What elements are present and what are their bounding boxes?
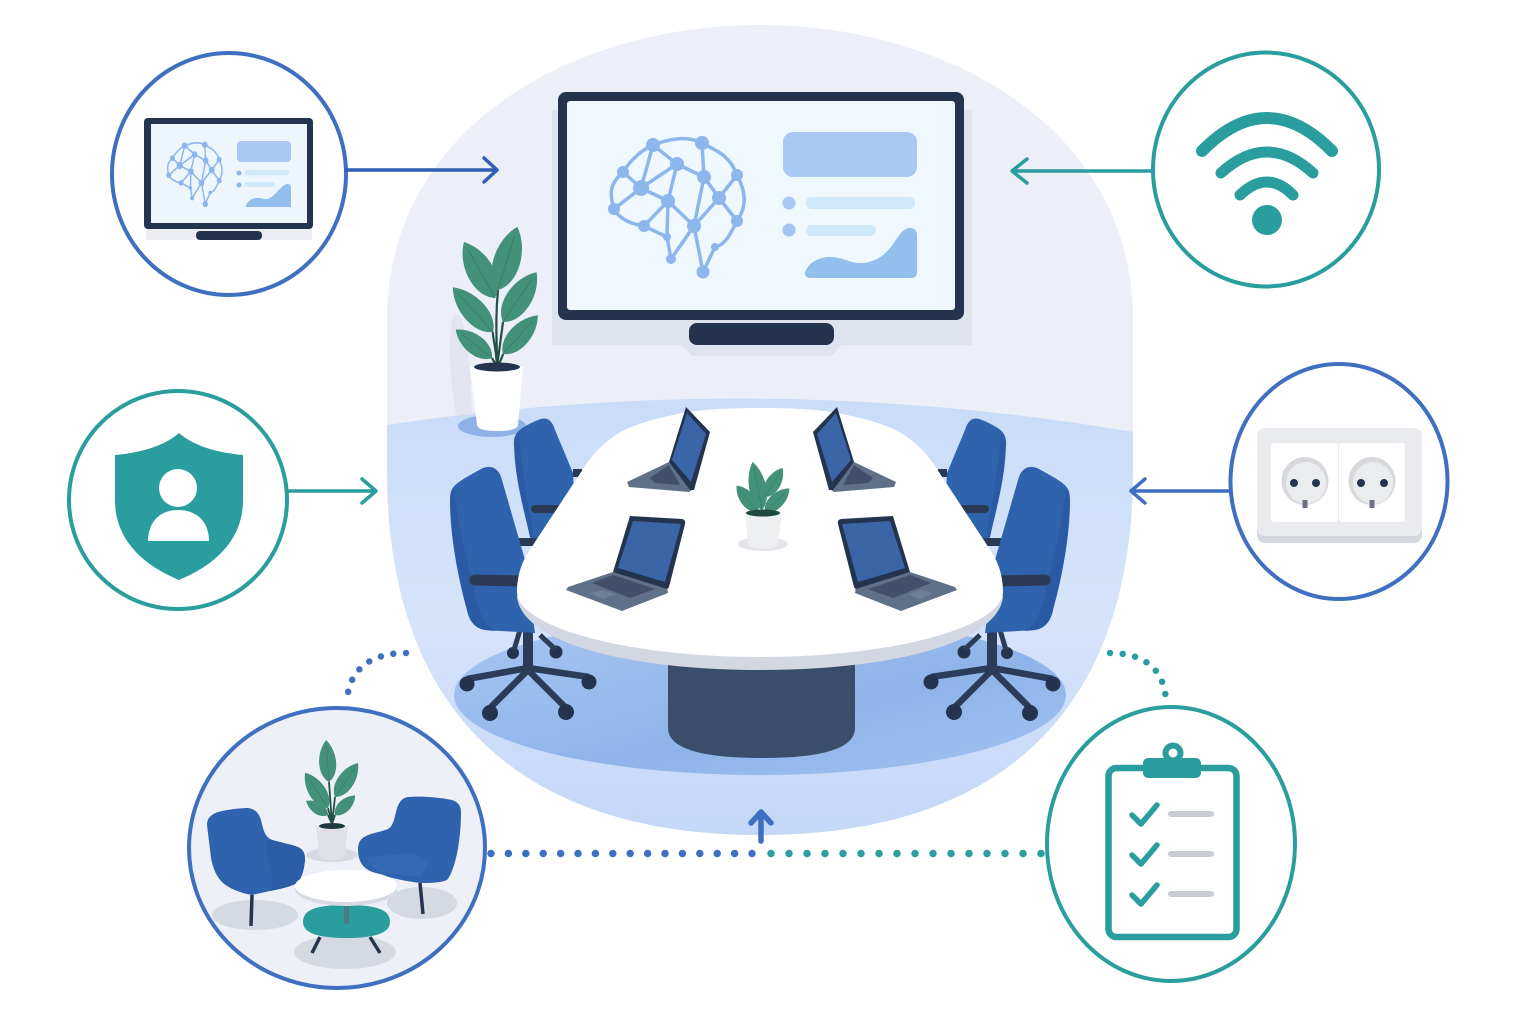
dotted link: checklist bottom [771,850,1042,857]
plant leaves [444,223,547,366]
slide header block [783,132,917,177]
rear left chair [514,418,582,545]
dotted link: lounge bottom [490,850,752,857]
soundbar camera [689,323,834,345]
circle [189,708,485,988]
panel: display callout [112,53,346,295]
rear right chair [938,418,1006,545]
display frame [558,92,964,320]
wall display [552,92,972,356]
circle [1230,364,1448,599]
left outlet [1282,457,1328,508]
panel: checklist callout [1047,707,1295,981]
panel: lounge callout [189,708,485,988]
plant wall shadow [450,315,472,415]
room floor [380,399,1140,840]
circle [69,391,287,609]
clipboard board [1108,768,1236,937]
ottoman [303,905,390,953]
table pedestal [668,660,855,758]
dotted link: lounge to room [347,653,406,704]
arrow: display to room [346,158,497,182]
display wall shadow [552,110,972,356]
small brain [166,142,222,207]
floor shadows [212,848,457,969]
arrow: power to room [1131,479,1230,503]
circle [112,53,346,295]
slide list [782,196,915,236]
arrow: security to room [288,479,376,503]
socket faces [1271,443,1405,522]
monitor screen [151,124,307,223]
right armchair [358,797,461,914]
table centre plant [731,460,795,551]
display screen [567,101,955,310]
room wall [387,25,1133,835]
arrow: wifi to room [1012,159,1153,183]
check items [1132,805,1211,904]
lounge plant [298,740,365,860]
laptop rear left [627,407,710,492]
arrow: up into room [751,812,771,841]
shield icon [115,433,243,580]
dotted link: checklist to room [1110,653,1166,704]
monitor frame [144,118,313,229]
front right chair [924,467,1070,721]
panel: meeting room [380,25,1140,840]
right outlet [1348,457,1396,508]
clipboard clip [1143,746,1201,778]
small soundbar [196,231,262,240]
small slide content [236,141,291,207]
coffee table [295,870,397,924]
table rim [517,596,1003,670]
circle [1153,52,1379,286]
laptop front left [566,516,685,611]
person body [148,510,209,541]
panel: wifi callout [1153,52,1379,286]
plant pot [470,362,523,431]
front left chair [450,467,596,721]
floor shadow under table [454,615,1066,775]
conference table [517,408,1003,670]
panel: power callout [1230,364,1448,599]
person head [159,469,197,507]
table top [517,408,1003,657]
laptop rear right [813,407,896,492]
wifi icon [1202,118,1332,235]
circle [1047,707,1295,981]
monitor shadow [146,228,312,240]
socket plate [1257,428,1422,543]
tall plant [444,223,547,437]
plant stems [492,290,503,367]
brain network graphic [608,136,744,278]
plant floor shadow [458,415,526,437]
panel: security callout [69,391,287,609]
slide area chart [805,228,917,278]
laptop front right [838,516,957,611]
left armchair [207,808,305,926]
